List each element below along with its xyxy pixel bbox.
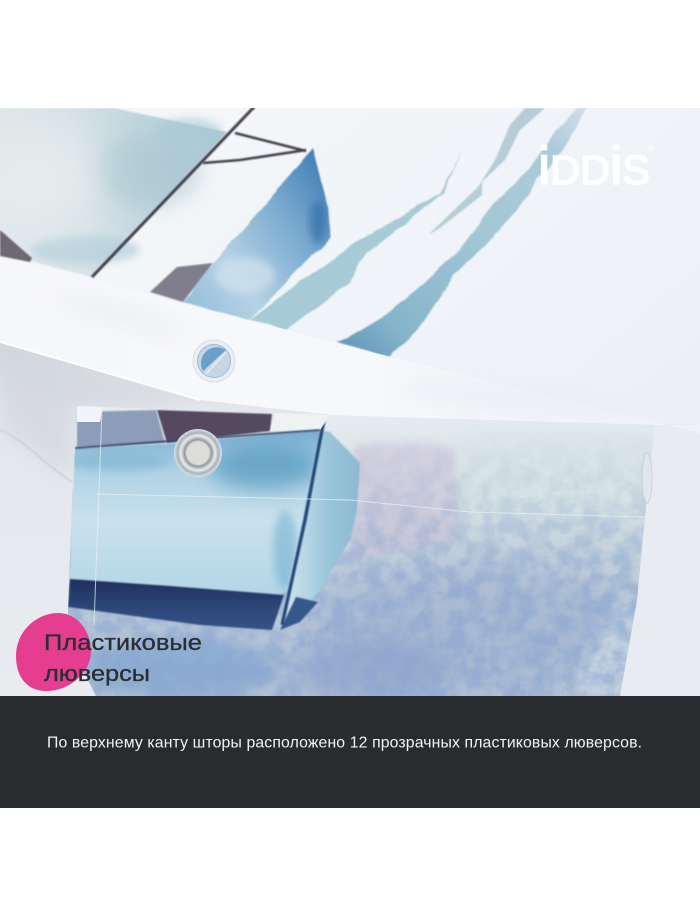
- grey panel: [150, 263, 213, 302]
- caption text: По верхнему канту шторы расположено 12 прозрачных пластиковых люверсов.: [47, 734, 642, 752]
- mast line: [92, 106, 255, 277]
- dark caption band: [0, 696, 700, 808]
- watercolor streak 3: [337, 108, 588, 357]
- hem fold of the curtain: [0, 310, 700, 430]
- dark waterline band: [68, 579, 284, 630]
- watercolor streak 1: [250, 150, 463, 330]
- stitch lines: [94, 410, 645, 625]
- grommet on the right edge: [642, 453, 652, 503]
- heading: [44, 630, 202, 686]
- boat hull: [70, 430, 320, 596]
- heading: Пластиковые: [44, 630, 202, 655]
- printed boat: sail and rigging: [0, 106, 588, 357]
- mast down hull: [282, 415, 325, 625]
- cabin roof: [77, 410, 165, 447]
- watercolor streak 2: [428, 108, 545, 235]
- folded pocket with printed boat: [60, 400, 670, 700]
- watercolor mottling: [68, 458, 646, 696]
- pink accent blob: [16, 613, 91, 691]
- sail watercolor: [0, 108, 227, 277]
- metal grommet on pocket: [174, 429, 222, 477]
- hull side panel: [280, 430, 360, 626]
- logo: [540, 144, 654, 186]
- curtain upper background: [0, 108, 700, 425]
- watercolor edge at left: [0, 430, 72, 482]
- logo: iDDiS: [538, 136, 650, 196]
- grey wash left of pocket: [4, 389, 120, 466]
- curtain area below hem: [0, 342, 700, 696]
- rigging lines: [203, 133, 306, 163]
- blue sail panel: [183, 148, 330, 320]
- soft shadow right of pocket: [620, 425, 700, 696]
- dark corner of cabin: [0, 230, 32, 262]
- plastic grommet on hem: [193, 340, 235, 382]
- infographic canvas: [0, 108, 700, 808]
- lavender wash: [350, 443, 456, 560]
- heading: люверсы: [44, 661, 150, 686]
- logo: ®: [648, 143, 655, 153]
- photo: curtain close-up: [0, 106, 700, 700]
